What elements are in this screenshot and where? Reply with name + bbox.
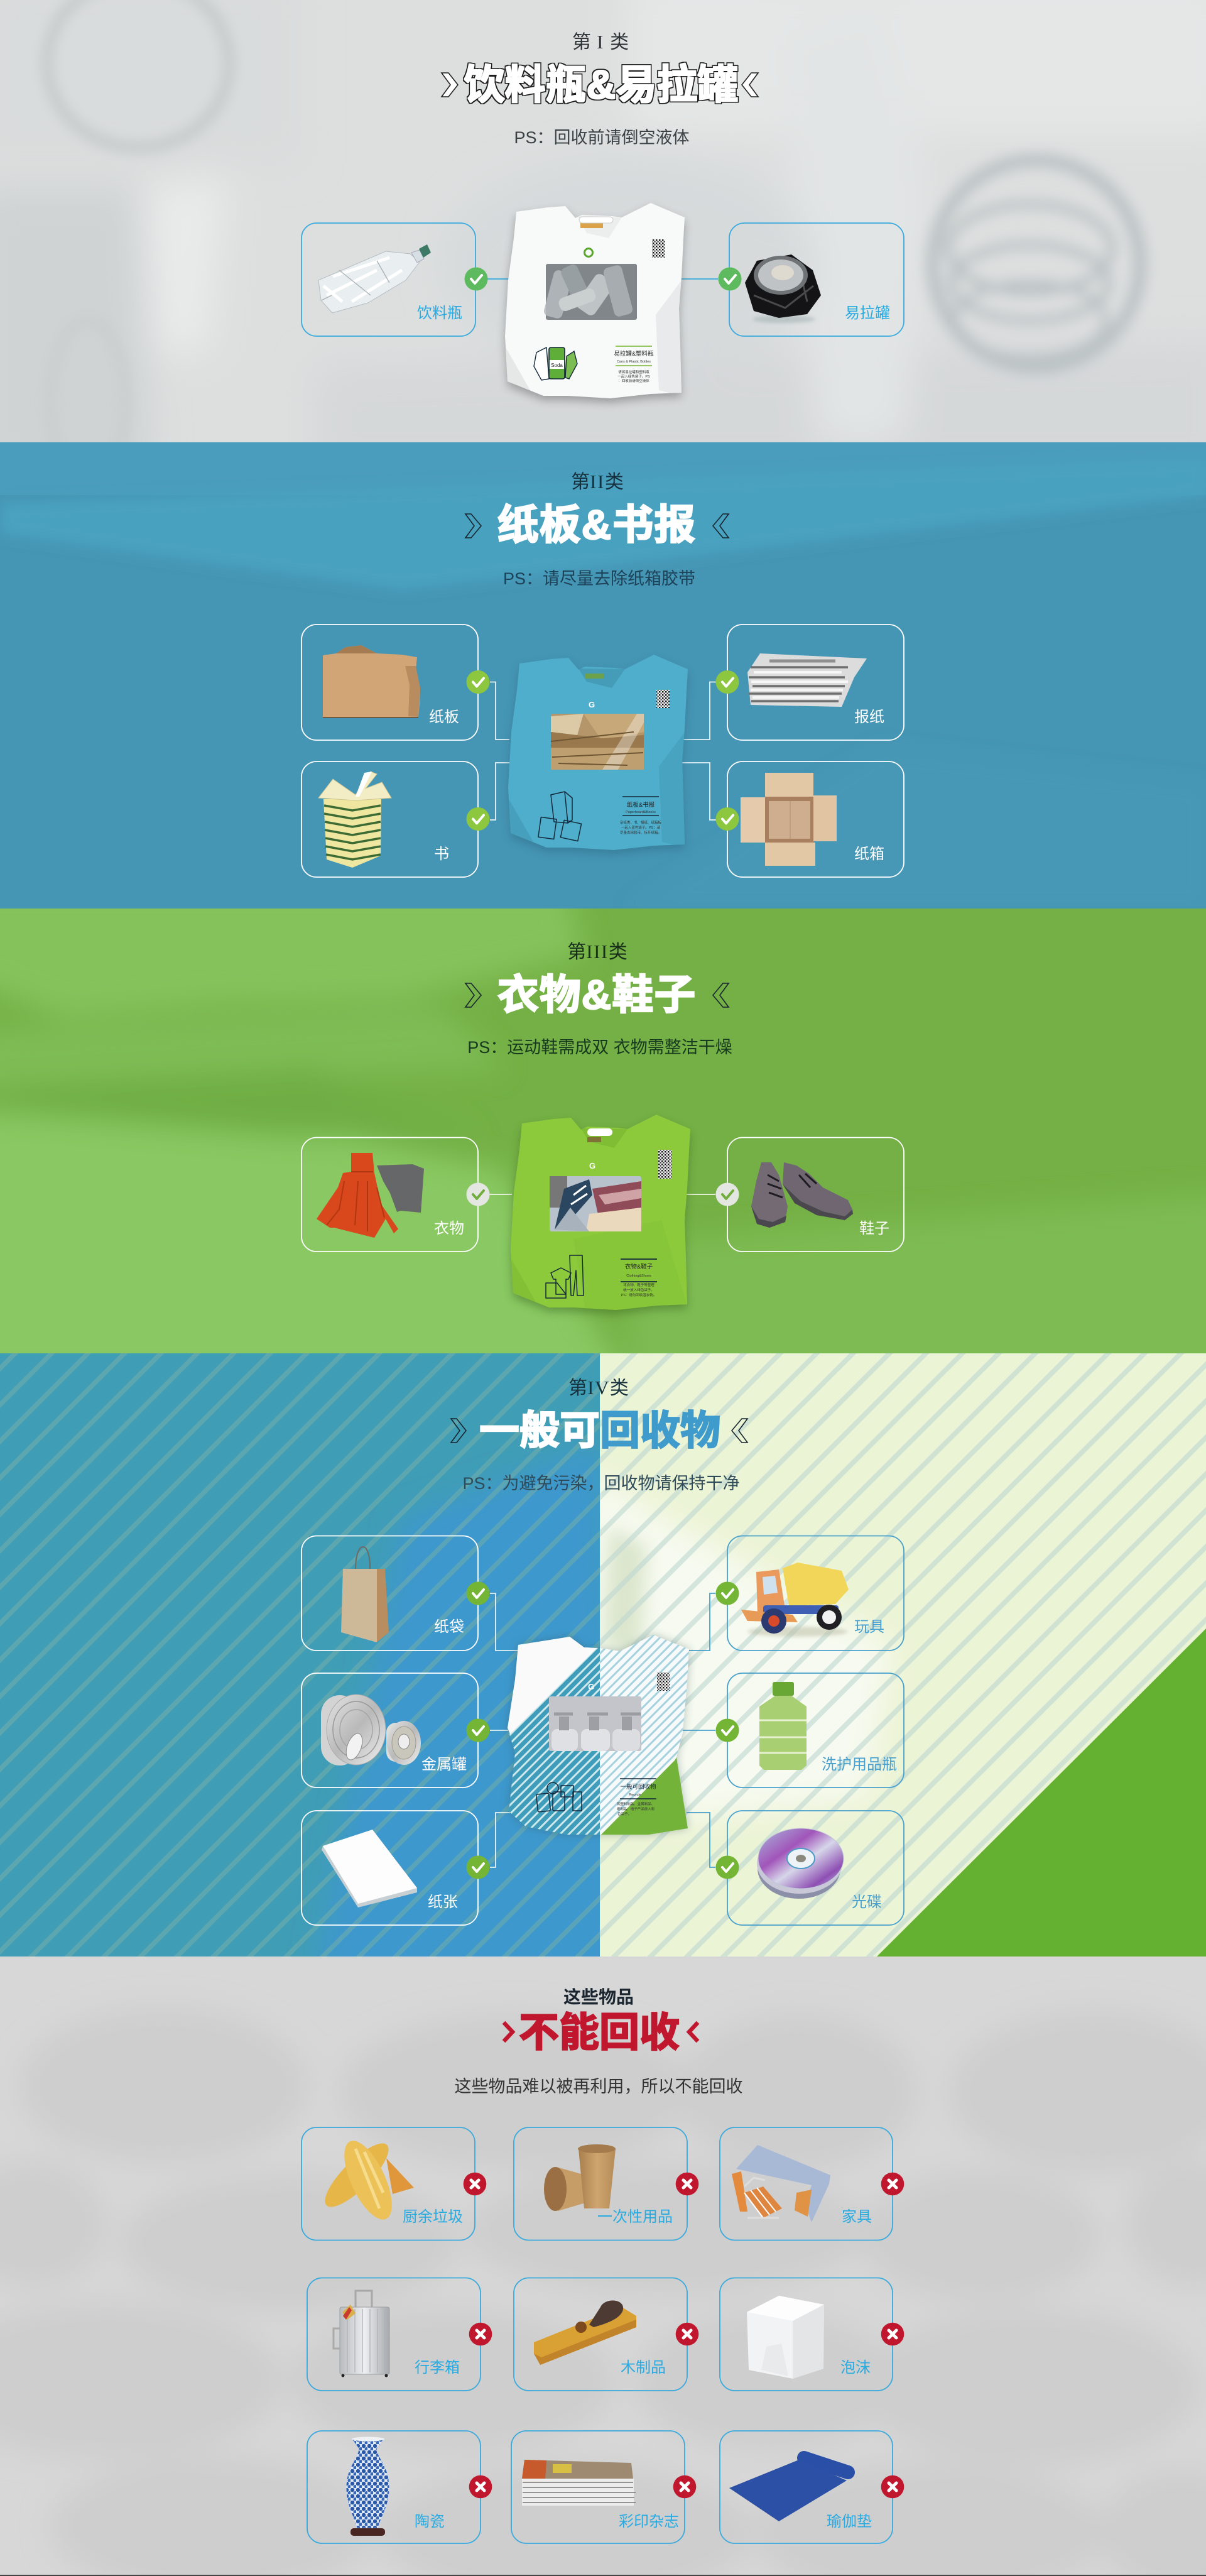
arrow: left chevron [465, 514, 481, 538]
label: 书 [434, 846, 449, 863]
heading [465, 971, 729, 1018]
bag icon: soda can and bottles [534, 347, 577, 380]
item: metal cans [321, 1695, 421, 1766]
title text: 衣物&鞋子 [497, 971, 696, 1018]
card: 光碟 [716, 1811, 904, 1925]
card: 衣物 [302, 1137, 490, 1252]
item: green bottle [759, 1682, 807, 1770]
background: split stripes [0, 1353, 1206, 1985]
recycling bag: general: G [588, 1682, 594, 1691]
heading [465, 501, 729, 548]
bag label text: 易拉罐&塑料瓶 [614, 350, 654, 357]
icon: check [466, 1182, 490, 1206]
bag label text [617, 1779, 656, 1816]
card: 报纸 [716, 625, 904, 740]
bag label text [621, 1259, 657, 1297]
recycling bag: green: G [589, 1161, 595, 1171]
item: blue and white vase [346, 2437, 389, 2536]
icon: check [466, 807, 490, 831]
card: 金属罐 [302, 1673, 490, 1787]
icon: cross [464, 2173, 486, 2195]
label: 纸板 [429, 709, 459, 726]
card: 家具 [720, 2127, 904, 2240]
recycling bag: white [505, 203, 685, 403]
bag label text [614, 346, 654, 383]
label: 一次性用品 [597, 2208, 673, 2225]
arrow: left chevron [451, 1419, 466, 1443]
item: desk and chair [732, 2145, 830, 2222]
label: 易拉罐 [845, 305, 890, 322]
background: blurred fabric [0, 880, 1206, 1382]
background: blurred grey circles [0, 1957, 1206, 2576]
arrow: right chevron [732, 1419, 747, 1443]
icon: cross [881, 2475, 904, 2498]
card: 纸张 [302, 1811, 490, 1925]
recycling bag: general [508, 1635, 689, 1835]
bag label text: 将衣物、鞋子等整理 [623, 1282, 655, 1287]
bag label text: 一起入绿色袋子。PS [617, 374, 650, 379]
arrow: right chevron [713, 514, 729, 538]
label: 光碟 [852, 1894, 882, 1911]
bag label text: 尽量去除胶带、拆开纸箱。 [620, 830, 661, 835]
category number: 第III类 [567, 941, 627, 963]
bag label text: ：回收前请倒空液体 [618, 378, 649, 383]
connector lines [490, 682, 716, 820]
category number: 第 I 类 [572, 31, 629, 53]
label: 衣物 [434, 1220, 464, 1237]
card: 彩印杂志 [511, 2431, 696, 2543]
icon: check [716, 807, 739, 831]
icon: cross [676, 2173, 698, 2195]
bag label text: PS：请勿回收湿衣物。 [621, 1292, 656, 1297]
arrow: left chevron [504, 2022, 513, 2041]
bag label text: 一起入蓝色袋子。PS：请 [621, 825, 661, 830]
arrow: right chevron [713, 983, 729, 1007]
lead-in text: 这些物品 [563, 1987, 634, 2007]
note: 这些物品难以被再利用，所以不能回收 [455, 2077, 742, 2096]
connector lines [489, 1194, 715, 1195]
card: 易拉罐 [719, 223, 904, 336]
card: 泡沫 [720, 2278, 904, 2391]
icon: cross [469, 2323, 492, 2345]
heading [442, 62, 758, 107]
background: blurred plastic bottles [0, 0, 1206, 484]
bag label text: Clothing&Shoes [626, 1274, 651, 1278]
label: 玩具 [854, 1618, 884, 1635]
bag label text: 杂纸类、书、报纸、纸箱板 [620, 820, 661, 825]
arrow: left chevron [465, 983, 481, 1007]
icon: check [716, 1719, 739, 1742]
icon: check [466, 1719, 490, 1742]
bag icon: box and papers [538, 792, 582, 841]
arrow: right chevron [689, 2022, 698, 2041]
label: 行李箱 [415, 2359, 460, 2376]
card: 书 [302, 761, 490, 877]
item: pair of shoes [751, 1162, 853, 1228]
bag icon: recyclables [536, 1782, 582, 1812]
label: 金属罐 [421, 1756, 467, 1773]
card: 行李箱 [307, 2278, 492, 2391]
bag label text: Cans & Plastic Bottles [617, 360, 651, 364]
recycling bag: blue [508, 655, 688, 854]
bag label text: 一般可回收物 [620, 1783, 656, 1791]
title text: 饮料瓶&易拉罐 [464, 62, 738, 107]
label: 纸张 [428, 1894, 458, 1911]
item: cardboard sheet [323, 645, 420, 718]
item: magazine stack [522, 2460, 636, 2506]
item: grey trousers [377, 1164, 424, 1213]
label: 彩印杂志 [619, 2513, 679, 2530]
card: 纸袋 [302, 1536, 490, 1651]
item: toy truck [741, 1563, 849, 1637]
icon: cross [676, 2323, 698, 2345]
icon: check [719, 268, 741, 290]
heading [504, 2010, 698, 2055]
arrow: left chevron [442, 73, 458, 97]
icon: cross [469, 2475, 492, 2498]
label: 陶瓷 [415, 2513, 445, 2530]
card: 纸箱 [716, 761, 904, 877]
card: 陶瓷 [307, 2431, 492, 2543]
panel: 不能回收 [0, 1957, 1206, 2576]
bag icon: soda can and bottles: Soda [551, 363, 563, 368]
label: 木制品 [621, 2359, 666, 2376]
title text: 不能回收 [519, 2010, 680, 2055]
item: stack of paper [322, 1830, 417, 1907]
panel: 第II类 纸板&书报 [0, 442, 1206, 909]
item: stack of discs [757, 1828, 844, 1899]
bag label text: 纸板&书报 [627, 801, 655, 809]
category number: 第II类 [571, 471, 624, 493]
item: wooden plane [534, 2301, 636, 2365]
connector lines [487, 278, 718, 280]
item: suitcase [334, 2291, 389, 2377]
card: 木制品 [514, 2278, 698, 2391]
card: 玩具 [716, 1536, 904, 1651]
note: PS：回收前请倒空液体 [514, 128, 690, 147]
bag label text: 色袋子。 [617, 1811, 631, 1816]
icon: cross [881, 2173, 904, 2195]
icon: check [716, 670, 739, 694]
card: 洗护用品瓶 [716, 1673, 904, 1787]
title text: blue half: 回收物 [600, 1408, 720, 1453]
item: crushed plastic bottle [318, 244, 431, 313]
icon: check [716, 1182, 739, 1206]
heading [451, 1408, 747, 1453]
card: 一次性用品 [514, 2127, 698, 2240]
label: 洗护用品瓶 [822, 1756, 897, 1773]
label: 家具 [842, 2208, 872, 2225]
item: red sweater [317, 1153, 398, 1238]
item: paper bag [341, 1547, 389, 1642]
item: open box [741, 773, 837, 866]
panel: 第III类 衣物&鞋子 [0, 880, 1206, 1382]
bag label text: 请将易拉罐和塑料瓶 [618, 369, 649, 374]
label: 厨余垃圾 [403, 2208, 463, 2225]
item: crushed can [745, 254, 821, 323]
label: 纸箱 [854, 846, 884, 863]
panel: 第IV类 一般可回收物 [0, 1353, 1206, 1985]
label: 瑜伽垫 [827, 2513, 872, 2530]
item: newspaper stack [747, 653, 867, 707]
note: PS：为避免污染，回收物请保持干净 [462, 1474, 740, 1493]
item: yoga mat [729, 2458, 848, 2521]
item: stack of books [318, 772, 391, 868]
panel: 第I类 饮料瓶&易拉罐 [0, 0, 1206, 484]
title text: 纸板&书报 [497, 501, 696, 548]
note: PS：请尽量去除纸箱胶带 [503, 569, 695, 588]
label: 泡沫 [840, 2359, 871, 2376]
arrow: right chevron [742, 73, 758, 97]
label: 报纸 [854, 709, 884, 726]
icon: check [466, 670, 490, 694]
bag label text: 纸制品、电子产品放入彩 [617, 1806, 655, 1811]
icon: cross [673, 2475, 696, 2498]
bag label text: Recycle [629, 1793, 641, 1797]
card: 鞋子 [716, 1137, 904, 1252]
category number: 第IV类 [568, 1377, 629, 1399]
title text: white half: 一般可 [479, 1408, 600, 1453]
bag icon: clothing and shoes [546, 1255, 584, 1298]
card: 厨余垃圾 [302, 2127, 486, 2240]
card: 纸板 [302, 625, 490, 740]
icon: check [716, 1582, 739, 1605]
label: 饮料瓶 [417, 305, 462, 322]
note: PS：运动鞋需成双 衣物需整洁干燥 [467, 1038, 732, 1057]
icon: check [716, 1856, 739, 1879]
bag label text: 衣物&鞋子 [625, 1263, 653, 1270]
icon: check [466, 1856, 490, 1879]
item: paper cups [544, 2144, 616, 2211]
label: 纸袋 [434, 1618, 464, 1635]
card: 瑜伽垫 [720, 2431, 904, 2543]
background: blurred cardboard [0, 442, 1206, 909]
icon: check [466, 1582, 490, 1605]
icon: cross [881, 2323, 904, 2345]
icon: check [465, 268, 487, 290]
bag label text: Paperboard&Books [626, 810, 656, 814]
item: foam box [747, 2296, 824, 2379]
recycling bag: green [511, 1115, 690, 1314]
bag label text: 统一放入绿色袋子。 [623, 1287, 655, 1292]
card: 饮料瓶 [302, 223, 487, 336]
connector lines [490, 1593, 519, 1867]
label: 鞋子 [859, 1220, 889, 1237]
bag label text: 将塑料制品、金属制品、 [617, 1801, 655, 1806]
bag label text [620, 797, 661, 835]
item: food scraps [317, 2134, 414, 2226]
recycling bag: blue: G [589, 700, 595, 709]
